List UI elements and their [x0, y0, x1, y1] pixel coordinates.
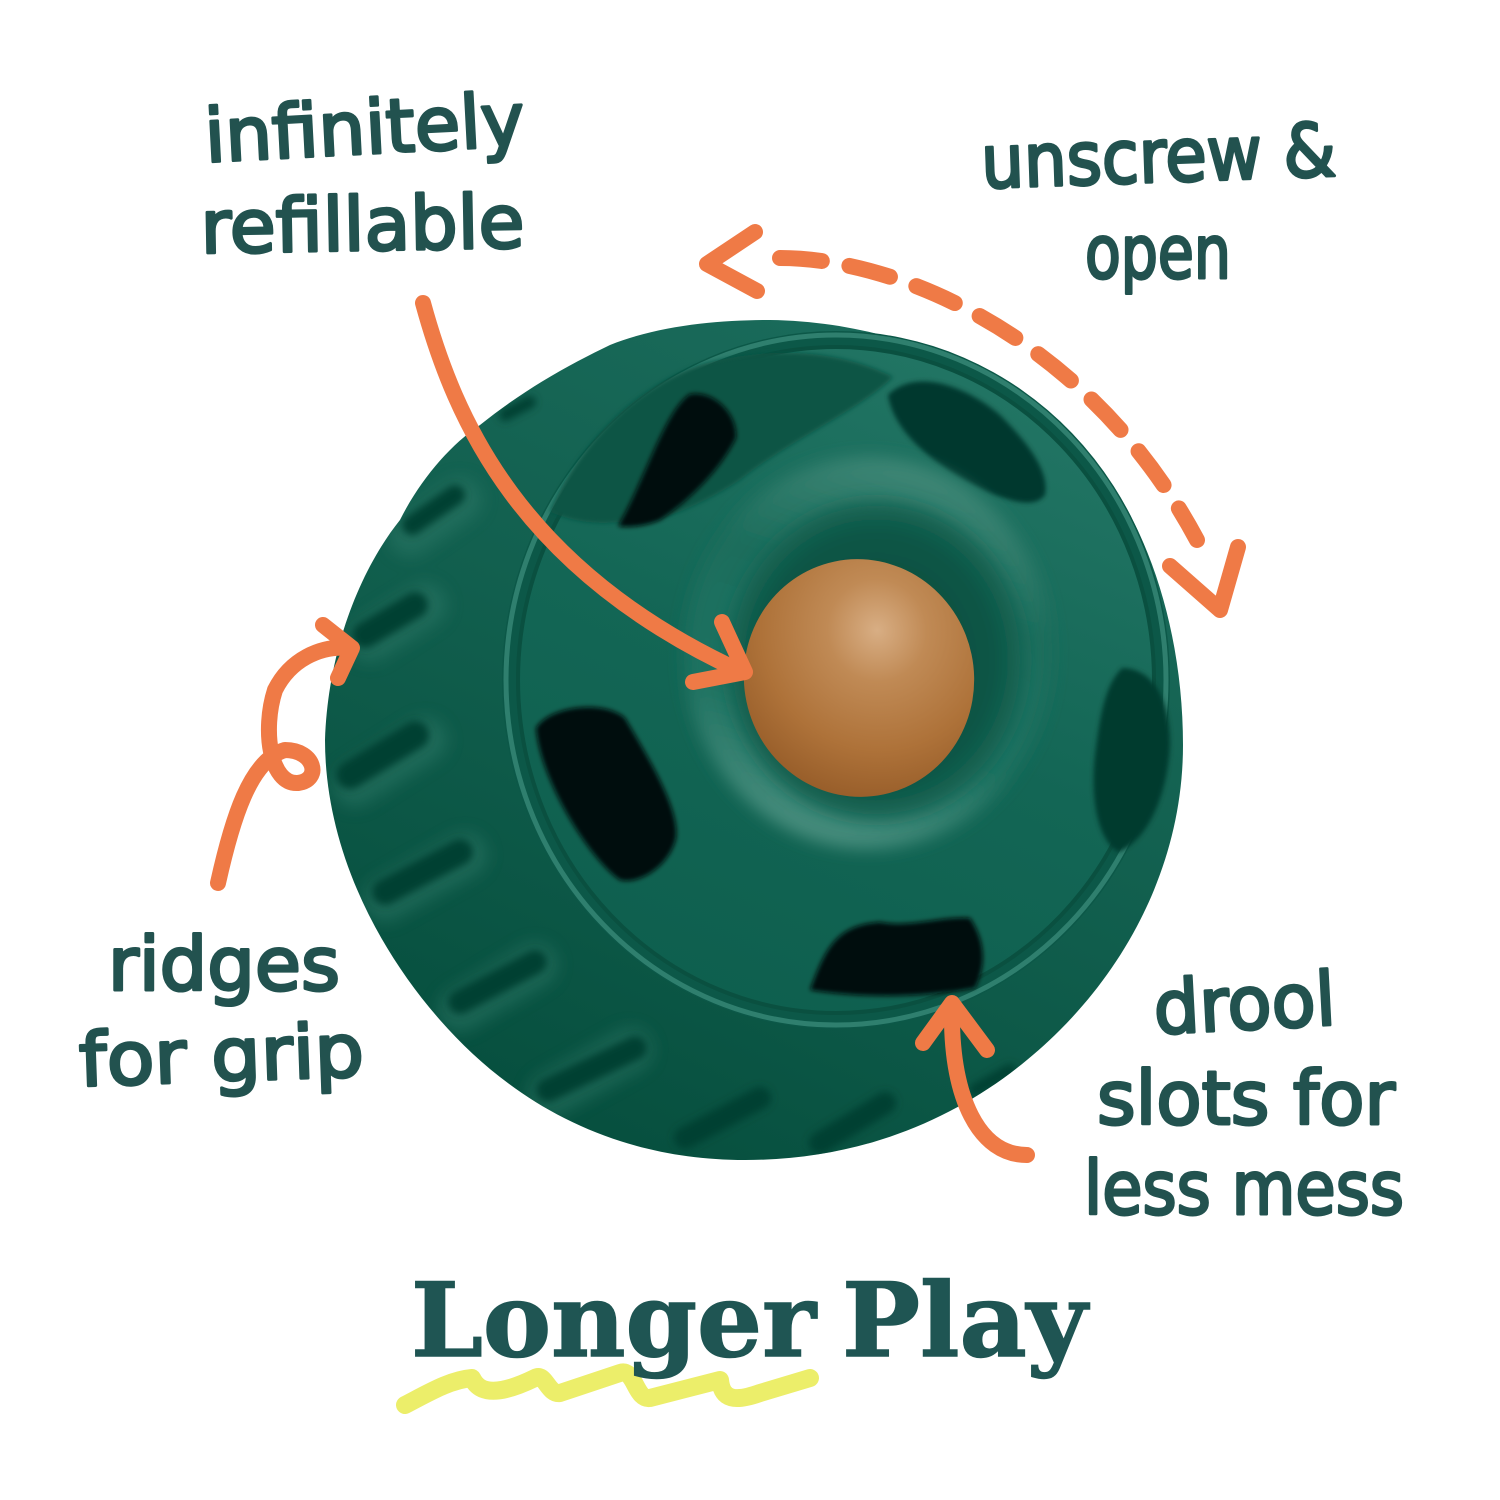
feed holes [536, 381, 1170, 996]
upper recess [550, 353, 893, 523]
inner face ring [502, 331, 1170, 1029]
label: drool slots: less mess [1084, 1146, 1404, 1232]
yellow underline squiggle [405, 1372, 810, 1405]
ball body [325, 320, 1183, 1160]
label: unscrew & open: unscrew & [980, 108, 1337, 206]
arrow: drool slot [923, 1003, 1027, 1155]
label: drool slots: drool [1151, 957, 1338, 1052]
label: ridges for grip: for grip [78, 1008, 365, 1104]
label: infinitely refillable [200, 77, 527, 271]
label: drool slots: slots for [1097, 1056, 1396, 1142]
title [411, 1261, 1090, 1381]
product: green treat ball [325, 320, 1183, 1160]
central dish [684, 457, 1052, 849]
grip ridges [350, 402, 1010, 1143]
label: drool slots [1084, 957, 1404, 1232]
label: ridges for grip [78, 922, 365, 1104]
label: infinitely refillable: refillable [200, 179, 525, 271]
title: Play [842, 1261, 1090, 1381]
label: unscrew & open: open [1085, 210, 1231, 296]
label: infinitely refillable: infinitely [202, 77, 527, 180]
arrow: dashed double arrow [707, 232, 1238, 610]
title: Longer [411, 1261, 817, 1381]
arrow: ridges [218, 625, 352, 883]
label: unscrew & open [980, 108, 1337, 296]
label: ridges for grip: ridges [108, 922, 340, 1008]
arrow: refillable to treat [423, 303, 745, 682]
kibble treat [722, 538, 996, 818]
